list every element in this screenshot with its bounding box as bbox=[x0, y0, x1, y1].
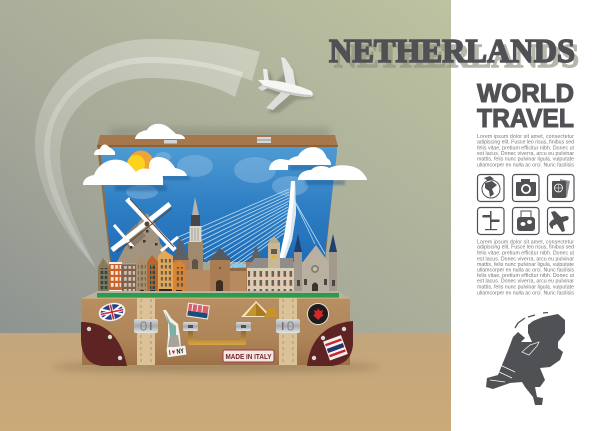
icon: globe bbox=[478, 174, 504, 202]
text block: intro bbox=[477, 134, 575, 168]
right leather corner bbox=[307, 321, 353, 366]
right strap bbox=[279, 298, 297, 365]
sticker: union jack bbox=[97, 300, 127, 324]
suitcase lid bbox=[97, 135, 338, 262]
small sails bbox=[112, 225, 178, 251]
sticker: pyramids bbox=[241, 301, 278, 317]
sticker: statue of liberty bbox=[163, 310, 186, 357]
text block: intro: felis vitae, pretium efficitur nibh. Donec ut bbox=[477, 145, 575, 151]
suitcase rim and grass bbox=[83, 291, 350, 298]
map of the Netherlands bbox=[486, 312, 565, 405]
text block: body: adipiscing elit. Fusce leo risus, finibus sed bbox=[477, 245, 574, 251]
sticker: made in italy bbox=[223, 350, 274, 362]
sticker: statue of liberty: I ♥ NY bbox=[169, 348, 185, 357]
windmill bbox=[112, 199, 178, 264]
background wall bbox=[0, 0, 451, 334]
text block: body: mattis, felis nunc pulvinar ligula, vulputate bbox=[477, 262, 574, 268]
sticker: rising sun flag bbox=[186, 303, 210, 319]
handle bbox=[183, 322, 251, 345]
cloud shadows bbox=[115, 165, 345, 191]
text block: intro: est lacus. Donec viverra, arcu eu pulvinar bbox=[477, 151, 574, 157]
fortified gate bbox=[185, 248, 248, 294]
sticker: thailand flag bbox=[323, 335, 348, 360]
lid shadow bbox=[110, 128, 330, 138]
icon: camera bbox=[512, 174, 539, 202]
text block: body: felis vitae, pretium efficitur nibh. Donec ut bbox=[477, 273, 575, 279]
title: Netherlands: NETHERLANDS bbox=[334, 38, 579, 75]
Binnenhof bbox=[294, 234, 337, 294]
sun bbox=[127, 150, 154, 176]
house 3 bbox=[122, 263, 136, 294]
text block: intro: adipiscing elit. Fusce leo risus, finibus sed bbox=[477, 140, 574, 146]
text block: body: felis vitae, pretium efficitur nibh. Donec ut bbox=[477, 250, 575, 256]
text block: body: est lacus. Donec viverra, arcu eu pulvinar bbox=[477, 279, 574, 285]
suitcase shadow bbox=[51, 362, 381, 372]
house 5 bbox=[147, 255, 158, 294]
house 2 bbox=[109, 262, 122, 294]
icon: signpost bbox=[478, 208, 504, 234]
house 1 bbox=[98, 258, 109, 294]
icon: passport bbox=[548, 174, 574, 202]
house 6 bbox=[158, 250, 173, 294]
icon: luggage bbox=[512, 208, 539, 234]
heading: world travel: TRAVEL bbox=[477, 105, 574, 133]
text block: intro: ullamcorper ex nulla ac orci. Nunc facilisis bbox=[477, 162, 574, 168]
clouds bbox=[83, 124, 367, 185]
heading: world travel: WORLD bbox=[477, 80, 574, 108]
Erasmus bridge bbox=[176, 181, 325, 270]
text block: body: Lorem ipsum dolor sit amet, consectetur bbox=[477, 239, 574, 245]
church tower bbox=[188, 197, 203, 294]
canal houses bbox=[98, 250, 185, 294]
sticker: made in italy: MADE IN ITALY bbox=[226, 354, 272, 361]
title: Netherlands: NETHERLANDS bbox=[329, 33, 575, 70]
grey spire building bbox=[173, 237, 189, 294]
icon: airplane bbox=[548, 208, 574, 234]
sticker: maple leaf badge bbox=[308, 304, 328, 324]
town hall bbox=[246, 236, 294, 294]
large sails bbox=[112, 199, 175, 252]
airplane bbox=[258, 57, 316, 113]
text block: body: ullamcorper ex nulla ac orci. Nunc facilisis bbox=[477, 268, 574, 274]
left leather corner bbox=[81, 322, 127, 366]
heading: world travel bbox=[477, 80, 574, 133]
house 7 bbox=[173, 260, 185, 294]
left buckle bbox=[134, 319, 158, 333]
text block: body: mattis, felis nunc pulvinar ligula, vulputate bbox=[477, 285, 574, 291]
white side panel bbox=[451, 0, 600, 431]
text block: intro: Lorem ipsum dolor sit amet, consectetur bbox=[477, 134, 574, 140]
house 4 bbox=[136, 255, 147, 294]
text block: body bbox=[477, 239, 575, 296]
flight trail bbox=[35, 39, 260, 268]
left strap bbox=[137, 298, 155, 365]
text block: intro: mattis, felis nunc pulvinar ligula, vulputate bbox=[477, 157, 574, 163]
faint sky clouds bbox=[126, 152, 308, 199]
suitcase body bbox=[82, 298, 350, 365]
text block: body: ullamcorper ex nulla ac orci. Nunc facilisis bbox=[477, 290, 574, 296]
text block: body: est lacus. Donec viverra, arcu eu pulvinar bbox=[477, 256, 574, 262]
floor bbox=[0, 333, 451, 431]
right buckle bbox=[276, 319, 300, 333]
lid latches bbox=[164, 137, 271, 144]
